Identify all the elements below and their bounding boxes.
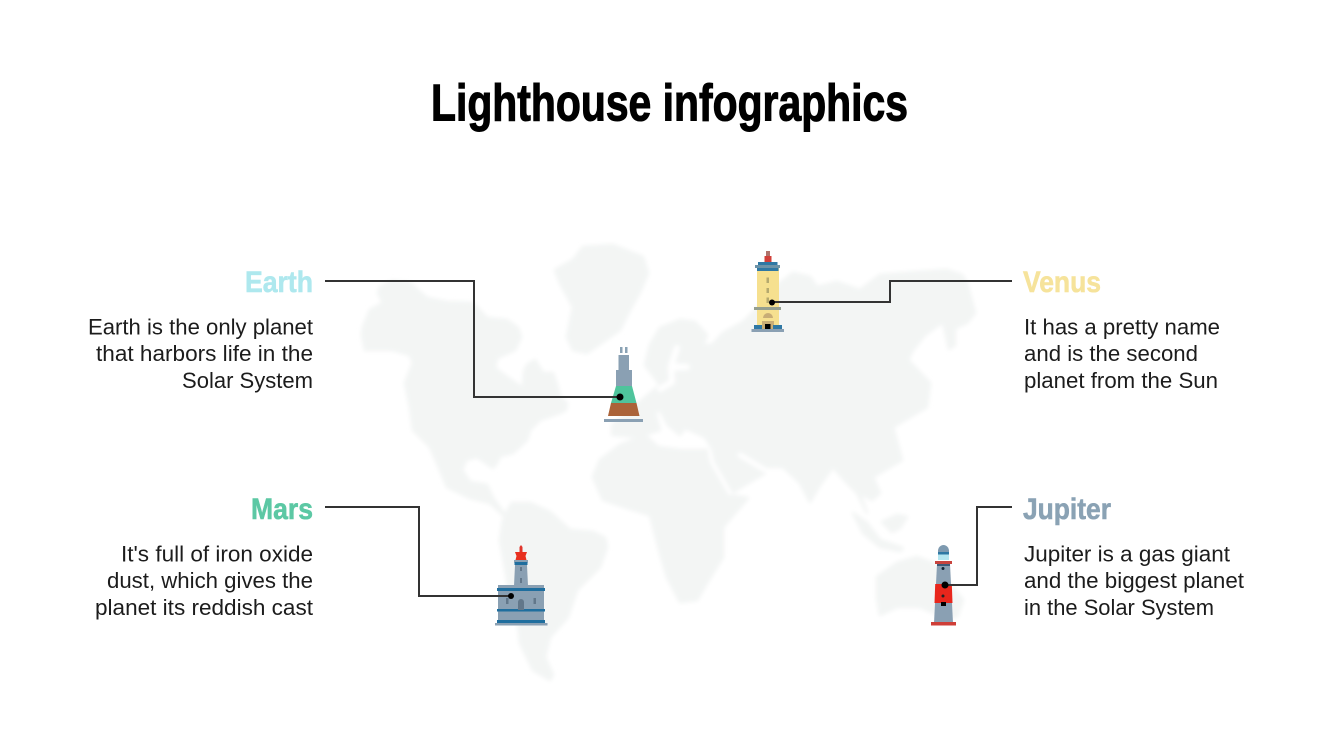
text: Mars description: It's full of iron oxide	[121, 542, 313, 566]
text: Mars description: dust, which gives the	[107, 568, 313, 593]
connector: Earth	[325, 281, 624, 400]
text: Jupiter description: and the biggest planet	[1024, 568, 1244, 593]
text: Mars description	[95, 542, 313, 620]
heading: Jupiter: Jupiter	[1023, 493, 1111, 526]
panel: Jupiter	[1023, 493, 1244, 620]
text: Mars description: planet its reddish cast	[95, 595, 313, 620]
icon: Mars lighthouse	[495, 545, 548, 626]
text: Jupiter description: Jupiter is a gas giant	[1024, 542, 1230, 566]
text: Jupiter description	[1024, 542, 1244, 620]
panel: Mars	[95, 493, 313, 620]
text: Earth description: Earth is the only planet	[88, 314, 313, 340]
icon: Venus lighthouse	[752, 251, 784, 332]
text: Jupiter description: in the Solar System	[1024, 595, 1214, 620]
connector: Jupiter	[942, 507, 1012, 588]
text: Venus description: planet from the Sun	[1024, 368, 1218, 393]
text: Earth description: that harbors life in the	[96, 341, 313, 366]
text: Venus description	[1024, 314, 1220, 393]
icon: Jupiter lighthouse	[931, 545, 956, 626]
world map	[362, 245, 975, 680]
heading: Earth: Earth	[245, 266, 313, 299]
title: Lighthouse infographics	[431, 74, 908, 132]
panel: Earth	[88, 266, 313, 393]
connector: Mars	[325, 507, 514, 599]
text: Earth description	[88, 314, 313, 393]
text: Venus description: and is the second	[1024, 341, 1198, 366]
heading: Mars: Mars	[251, 493, 313, 526]
connector: Venus	[769, 281, 1012, 306]
icon: Earth lighthouse	[604, 347, 643, 422]
heading: Venus: Venus	[1023, 266, 1101, 299]
text: Earth description: Solar System	[182, 368, 313, 393]
text: Venus description: It has a pretty name	[1024, 314, 1220, 340]
panel: Venus	[1023, 266, 1220, 393]
